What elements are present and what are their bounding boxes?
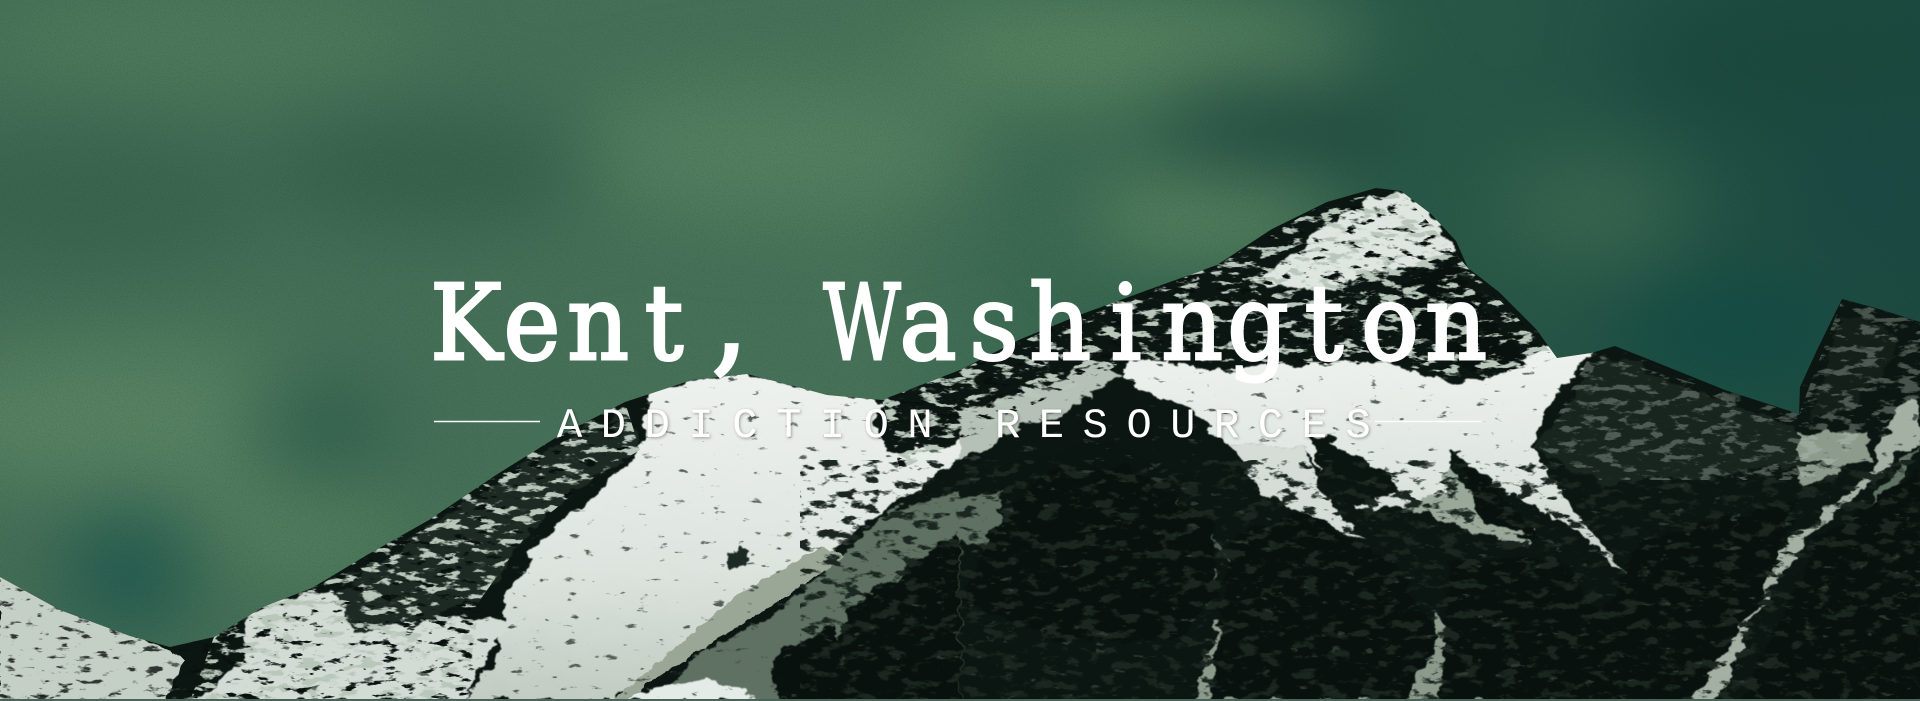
rocky ridge, left face: [334, 355, 1802, 633]
title: n: [1425, 262, 1487, 384]
dark rock outcrops: [726, 318, 1898, 699]
title: o: [1361, 262, 1419, 384]
mountain range: [0, 188, 1920, 699]
title: s: [969, 262, 1019, 384]
subtitle with rules: ADDICTION RESOURCES: [557, 402, 1389, 450]
title: e: [504, 262, 560, 384]
faint texture on dark rock: [800, 460, 1920, 701]
title: n: [1161, 262, 1223, 384]
faint snow specks on right ridge: [1540, 302, 1920, 480]
title: [430, 238, 1487, 390]
diagonal snow band: [612, 547, 845, 701]
title: W: [824, 262, 900, 384]
title: ,: [711, 238, 749, 390]
bright snow fields: [184, 191, 1627, 701]
bottom edge line: [0, 699, 1920, 701]
rock specks, lower left: [0, 585, 494, 699]
shaded snow patches: [661, 397, 1920, 701]
title: t: [645, 262, 683, 384]
title: g: [1227, 262, 1289, 384]
title: a: [899, 262, 957, 384]
title: h: [1029, 262, 1091, 384]
left snow hill: [0, 575, 185, 701]
sparse shading across snow: [0, 180, 1920, 701]
title: K: [430, 262, 502, 384]
title: n: [567, 262, 629, 384]
snow specks on rock: [191, 191, 1552, 699]
rock specks, ridge and right side: [191, 192, 1554, 699]
title: i: [1111, 262, 1141, 384]
title: t: [1305, 262, 1343, 384]
